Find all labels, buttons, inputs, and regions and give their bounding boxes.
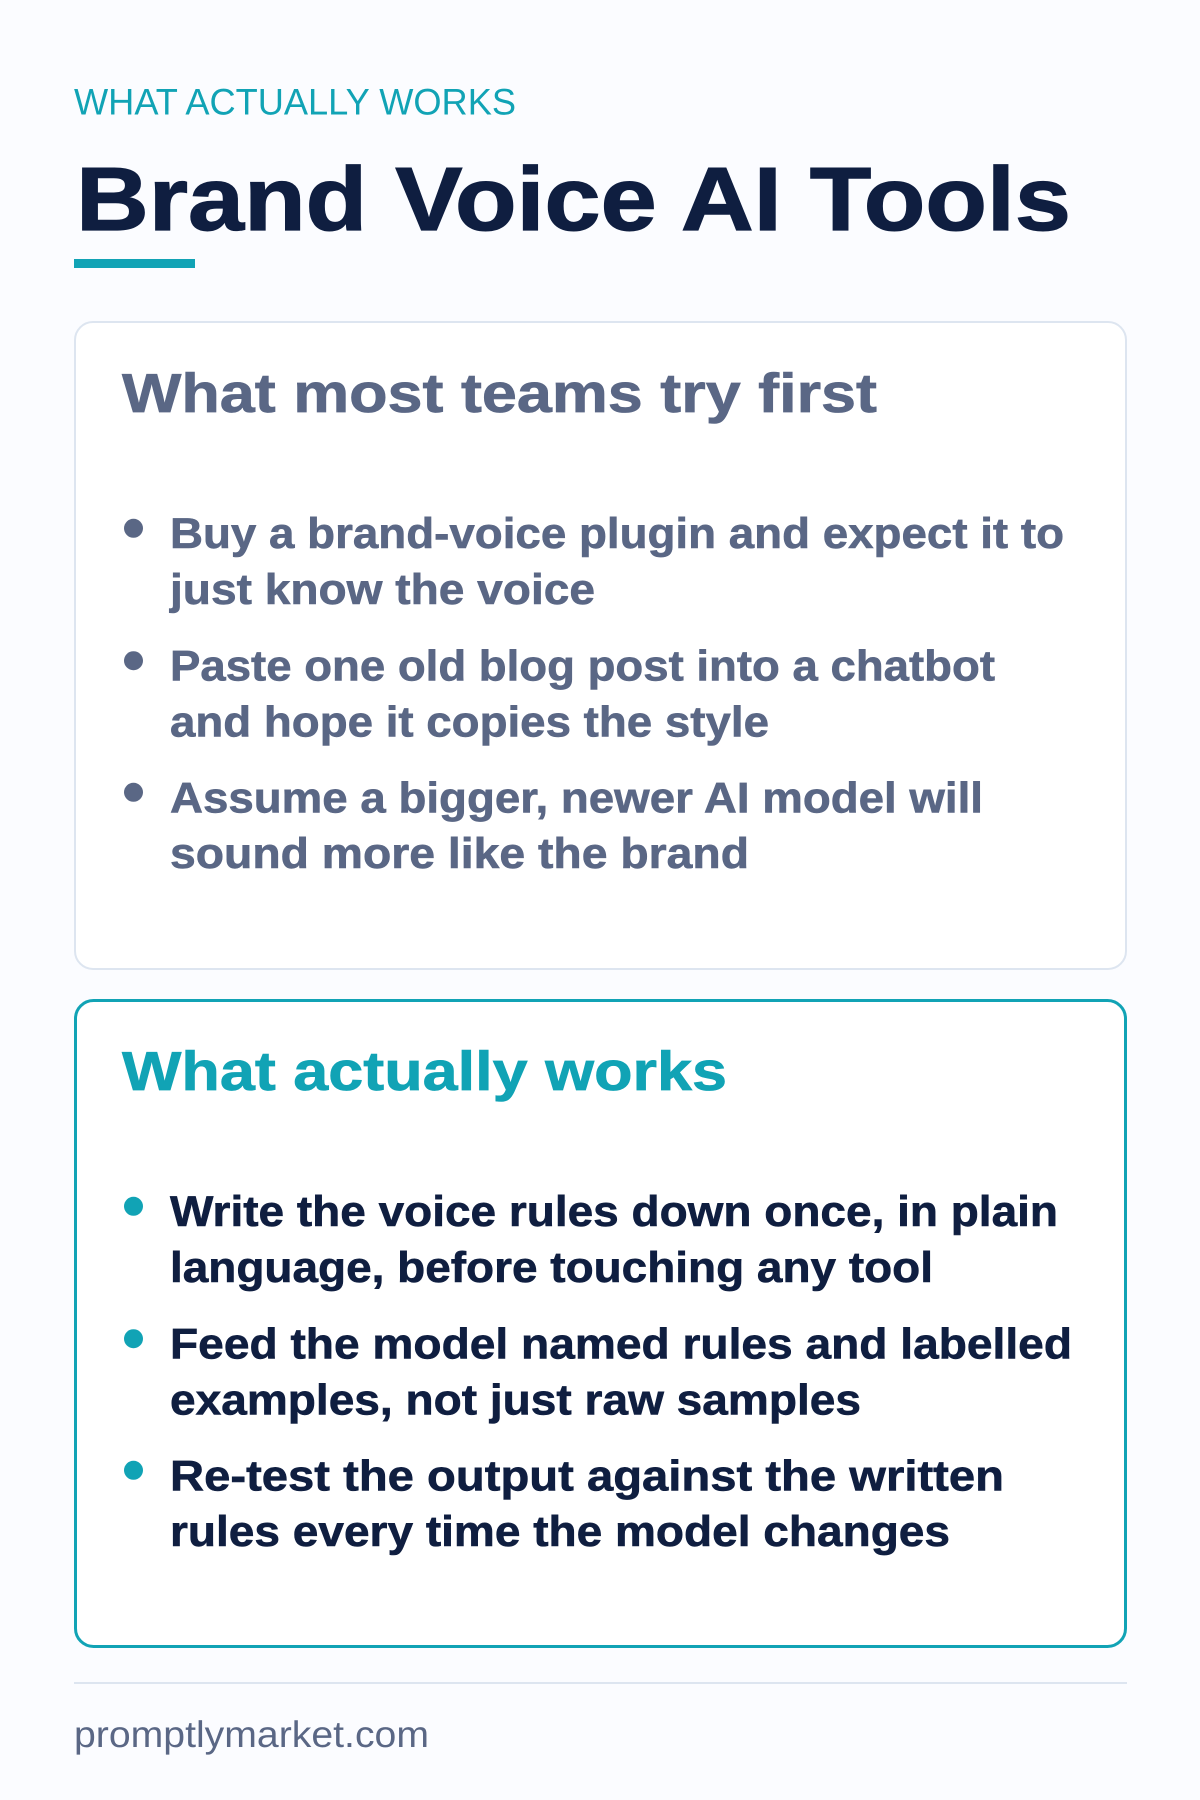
title: Brand Voice AI Tools (76, 150, 1071, 250)
list item: chatbot: Paste one old blog post into a chatbot (170, 642, 995, 690)
list item: feed model: examples, not just raw samples (170, 1376, 861, 1424)
list item: re-test: rules every time the model changes (170, 1508, 950, 1556)
footer website: promptlymarket.com (74, 1714, 429, 1755)
list item: bigger model: Assume a bigger, newer AI model will (170, 774, 983, 822)
list item: write rules: Write the voice rules down once, in plain (170, 1188, 1058, 1236)
list item: plugin (124, 510, 1064, 614)
panel: what most teams try first (75, 322, 1126, 969)
eyebrow label: WHAT ACTUALLY WORKS (74, 82, 516, 122)
list item: plugin: just know the voice (169, 566, 595, 614)
list item: bigger model: sound more like the brand (170, 830, 749, 878)
list item: feed model (124, 1320, 1072, 1424)
list item: chatbot: and hope it copies the style (170, 698, 769, 746)
list item: bigger model (124, 774, 983, 878)
list item: chatbot (124, 642, 995, 746)
title accent bar (74, 259, 195, 268)
list item: write rules (124, 1188, 1058, 1292)
list item: write rules: language, before touching any tool (170, 1244, 933, 1292)
panel heading: What most teams try first (122, 362, 877, 424)
list item: feed model: Feed the model named rules and labelled (170, 1320, 1072, 1368)
panel: what actually works (76, 1000, 1126, 1646)
panel background (75, 322, 1126, 969)
panel background (76, 1000, 1126, 1646)
list item: re-test (124, 1452, 1004, 1556)
list item: re-test: Re-test the output against the written (170, 1452, 1004, 1500)
list item: plugin: Buy a brand-voice plugin and expect it to (170, 510, 1064, 558)
panel heading: What actually works (122, 1040, 727, 1102)
